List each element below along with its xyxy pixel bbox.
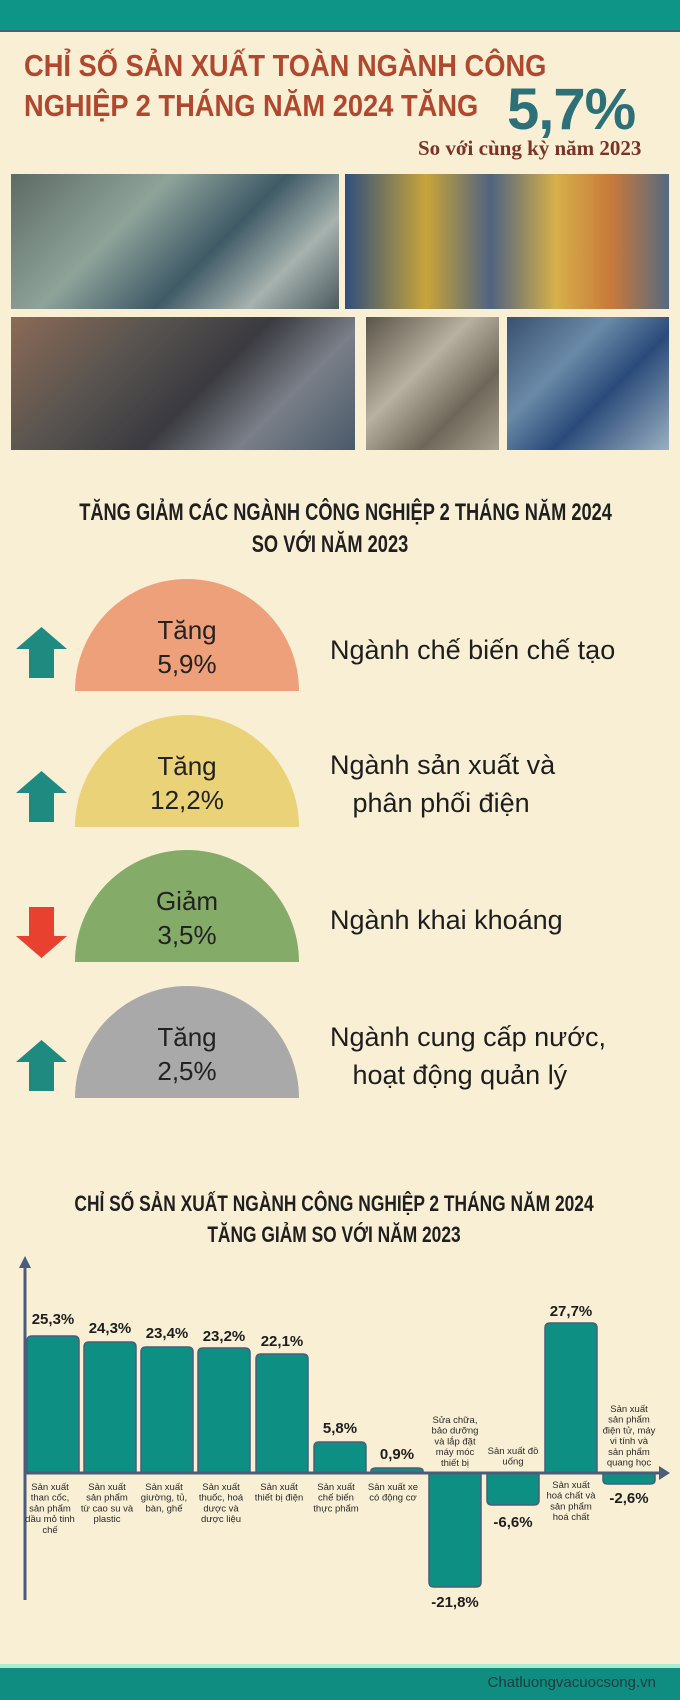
category labels: điện tử, máy xyxy=(603,1425,656,1436)
dome 1 xyxy=(75,579,299,691)
category labels: than cốc, xyxy=(31,1493,69,1504)
dome 3: Giảm xyxy=(156,886,218,916)
category labels xyxy=(25,1404,656,1536)
dome 2 xyxy=(75,715,299,827)
category labels: quang học xyxy=(607,1458,651,1468)
category labels: Sản xuất xyxy=(202,1482,240,1493)
value labels: -2,6% xyxy=(609,1490,649,1507)
label 2 xyxy=(330,750,556,818)
category labels: thực phẩm xyxy=(313,1503,359,1514)
category labels: dược liệu xyxy=(201,1514,241,1525)
photo 1 xyxy=(11,174,339,309)
category labels: Sản xuất xyxy=(31,1482,69,1493)
section heading 1: SO VỚI NĂM 2023 xyxy=(252,531,408,558)
dome 1: Tăng xyxy=(157,615,217,645)
value labels: -6,6% xyxy=(493,1514,533,1531)
category labels: bàn, ghế xyxy=(146,1503,183,1514)
photo grid xyxy=(11,174,669,450)
photo 4 xyxy=(366,317,499,450)
item 2 arrow up xyxy=(16,771,67,822)
category labels: thiết bị điện xyxy=(255,1493,303,1504)
dome 4: Tăng xyxy=(157,1022,217,1052)
title: NGHIỆP 2 THÁNG NĂM 2024 TĂNG xyxy=(24,88,478,123)
category labels: và lắp đặt xyxy=(434,1436,476,1447)
category labels: chế xyxy=(42,1525,58,1536)
top band xyxy=(0,0,680,32)
category labels: vi tính và xyxy=(610,1436,649,1447)
category labels: uống xyxy=(502,1457,524,1468)
value labels: 24,3% xyxy=(89,1320,131,1337)
section heading 2: CHỈ SỐ SẢN XUẤT NGÀNH CÔNG NGHIỆP 2 THÁNG NĂM 2024 xyxy=(74,1191,594,1216)
dome 2: Tăng xyxy=(157,751,217,781)
category labels: bảo dưỡng xyxy=(432,1426,478,1437)
category labels: Sản xuất xyxy=(552,1480,590,1491)
item 4 arrow up xyxy=(16,1040,67,1091)
section heading 1 xyxy=(79,498,612,558)
category labels: Sản xuất xyxy=(145,1482,183,1493)
value labels: 23,2% xyxy=(203,1328,245,1345)
dome 4: 2,5% xyxy=(157,1056,217,1086)
dome 4 xyxy=(75,986,299,1098)
category labels: sản phẩm xyxy=(550,1501,592,1512)
category labels: Sản xuất xyxy=(317,1482,355,1493)
category labels: máy móc xyxy=(436,1447,475,1458)
photo 3 xyxy=(11,317,355,450)
value labels: 0,9% xyxy=(380,1446,414,1463)
label 4 xyxy=(330,1022,606,1090)
category labels: Sửa chữa, xyxy=(433,1415,477,1426)
label 4: hoạt động quản lý xyxy=(352,1060,567,1090)
category labels: Sản xuất xyxy=(88,1482,126,1493)
value labels: -21,8% xyxy=(431,1594,479,1611)
category labels: thuốc, hoá xyxy=(199,1493,244,1504)
footer band xyxy=(0,1664,680,1700)
dome 1: 5,9% xyxy=(157,649,217,679)
value labels: 23,4% xyxy=(146,1325,188,1342)
dome 3 xyxy=(75,850,299,962)
label 2: Ngành sản xuất và xyxy=(330,750,555,780)
label 1: Ngành chế biến chế tạo xyxy=(330,635,615,665)
category labels: Sản xuất xe xyxy=(368,1482,418,1493)
value labels: 22,1% xyxy=(261,1333,303,1350)
category labels: dược và xyxy=(203,1503,239,1514)
dome 2: 12,2% xyxy=(150,785,224,815)
axes xyxy=(19,1256,670,1600)
section heading 2: TĂNG GIẢM SO VỚI NĂM 2023 xyxy=(207,1222,461,1247)
value labels: 5,8% xyxy=(323,1420,357,1437)
photo 5 xyxy=(507,317,669,450)
value labels: 25,3% xyxy=(32,1311,74,1328)
title: CHỈ SỐ SẢN XUẤT TOÀN NGÀNH CÔNG xyxy=(24,48,546,83)
category labels: sản phẩm xyxy=(608,1415,650,1426)
category labels: hoá chất xyxy=(553,1512,590,1523)
category labels: sản phẩm xyxy=(86,1493,128,1504)
category labels: plastic xyxy=(94,1514,121,1525)
value labels xyxy=(32,1303,649,1611)
category labels: chế biến xyxy=(318,1493,354,1504)
category labels: Sản xuất xyxy=(260,1482,298,1493)
category labels: Sản xuất đồ xyxy=(488,1446,538,1457)
category labels: từ cao su và xyxy=(81,1503,134,1514)
label 4: Ngành cung cấp nước, xyxy=(330,1022,606,1052)
headline number: 5,7% xyxy=(507,77,635,142)
category labels: hoá chất và xyxy=(546,1491,596,1502)
title xyxy=(24,48,641,160)
category labels: dầu mỏ tinh xyxy=(25,1514,75,1525)
section heading 1: TĂNG GIẢM CÁC NGÀNH CÔNG NGHIỆP 2 THÁNG NĂM 2024 xyxy=(79,499,612,526)
category labels: sản phẩm xyxy=(29,1503,71,1514)
dome 3: 3,5% xyxy=(157,920,217,950)
category labels: giường, tủ, xyxy=(141,1493,187,1504)
label 2: phân phối điện xyxy=(352,788,530,818)
item 3 arrow down xyxy=(16,907,67,958)
subtitle: So với cùng kỳ năm 2023 xyxy=(418,136,641,160)
value labels: 27,7% xyxy=(550,1303,592,1320)
item 1 arrow up xyxy=(16,627,67,678)
label 3: Ngành khai khoáng xyxy=(330,905,563,935)
photo 2 xyxy=(345,174,669,309)
category labels: có động cơ xyxy=(369,1493,417,1504)
section heading 2 xyxy=(74,1190,594,1247)
category labels: Sản xuất xyxy=(610,1404,648,1415)
category labels: sản phẩm xyxy=(608,1447,650,1458)
bar chart xyxy=(19,1256,670,1611)
footer source: Chatluongvacuocsong.vn xyxy=(488,1674,656,1691)
category labels: thiết bị xyxy=(441,1458,469,1469)
